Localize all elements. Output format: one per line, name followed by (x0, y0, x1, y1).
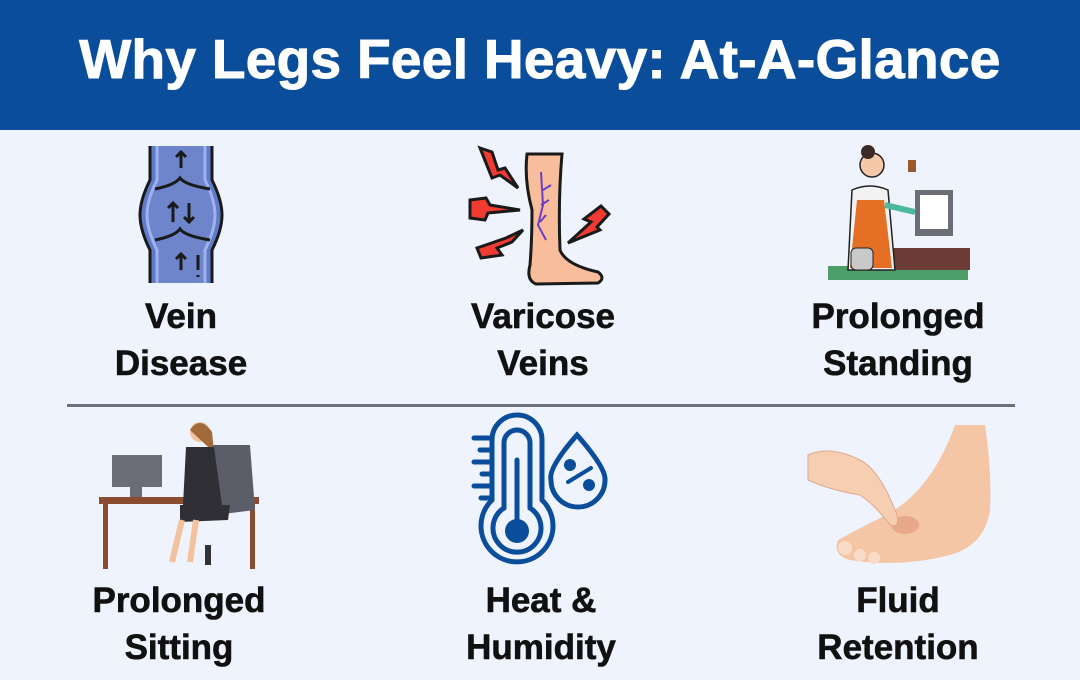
icon: swollen foot (808, 425, 990, 564)
label: fluid retention (817, 581, 979, 667)
icon: thermometer and humidity drop (474, 415, 605, 562)
icon: sitting woman at desk (99, 422, 259, 569)
icon: varicose leg (470, 148, 609, 284)
label: varicose veins: Varicose (471, 297, 615, 336)
icon: standing worker (828, 145, 970, 280)
label: heat & humidity: Humidity (466, 628, 616, 667)
label: vein disease: Vein (145, 297, 217, 336)
label: prolonged sitting: Prolonged (92, 581, 266, 620)
label: prolonged sitting (92, 581, 266, 667)
label: vein disease: Disease (115, 344, 247, 383)
label: fluid retention: Fluid (856, 581, 940, 620)
label: prolonged standing: Prolonged (811, 297, 985, 336)
icon: vein (140, 146, 222, 283)
label: vein disease (115, 297, 247, 383)
title: Why Legs Feel Heavy: At-A-Glance (79, 28, 1001, 90)
label: varicose veins (470, 297, 615, 383)
label: prolonged standing: Standing (823, 344, 973, 383)
label: fluid retention: Retention (817, 628, 979, 667)
label: varicose veins: Veins (497, 344, 589, 383)
label: prolonged sitting: Sitting (125, 628, 233, 667)
header banner (0, 0, 1080, 130)
label: heat & humidity: Heat & (486, 581, 596, 620)
label: prolonged standing (811, 297, 985, 383)
label: heat & humidity (466, 581, 616, 667)
